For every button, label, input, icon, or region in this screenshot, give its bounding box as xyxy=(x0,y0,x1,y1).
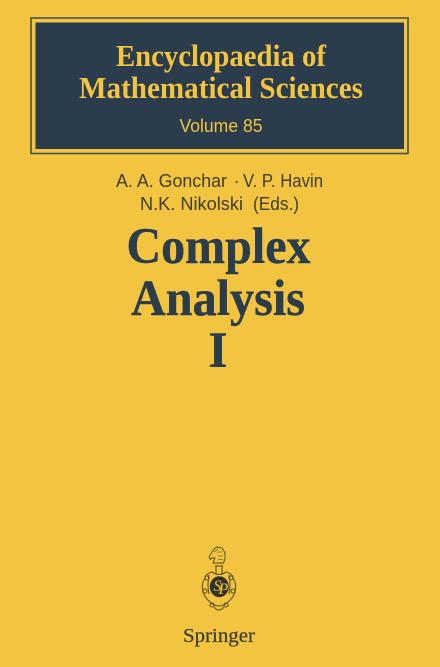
icon: springer knight logo xyxy=(202,547,236,610)
book title: I xyxy=(208,323,228,379)
editors: · xyxy=(234,170,240,191)
knight head xyxy=(209,547,225,563)
volume number: Volume 85 xyxy=(180,116,262,136)
editors: (Eds.) xyxy=(253,193,299,214)
series title panel xyxy=(31,18,408,154)
seal monogram: S xyxy=(214,578,222,595)
series title: Encyclopaedia of xyxy=(116,39,327,73)
seal xyxy=(210,576,229,597)
series title xyxy=(79,39,363,105)
ornament scrolls xyxy=(202,572,236,610)
series title: Mathematical Sciences xyxy=(79,71,363,105)
editors: N.K. Nikolski xyxy=(140,193,243,214)
editors xyxy=(116,170,323,214)
editors: A. A. Gonchar xyxy=(116,170,227,191)
publisher name: Springer xyxy=(183,626,256,647)
book title xyxy=(126,219,311,379)
seal monogram xyxy=(214,578,228,598)
seal monogram: P xyxy=(218,581,228,598)
editors: V. P. Havin xyxy=(243,170,323,191)
book title: Analysis xyxy=(131,271,305,327)
book title: Complex xyxy=(126,219,311,275)
knight neck and crest xyxy=(214,563,224,574)
